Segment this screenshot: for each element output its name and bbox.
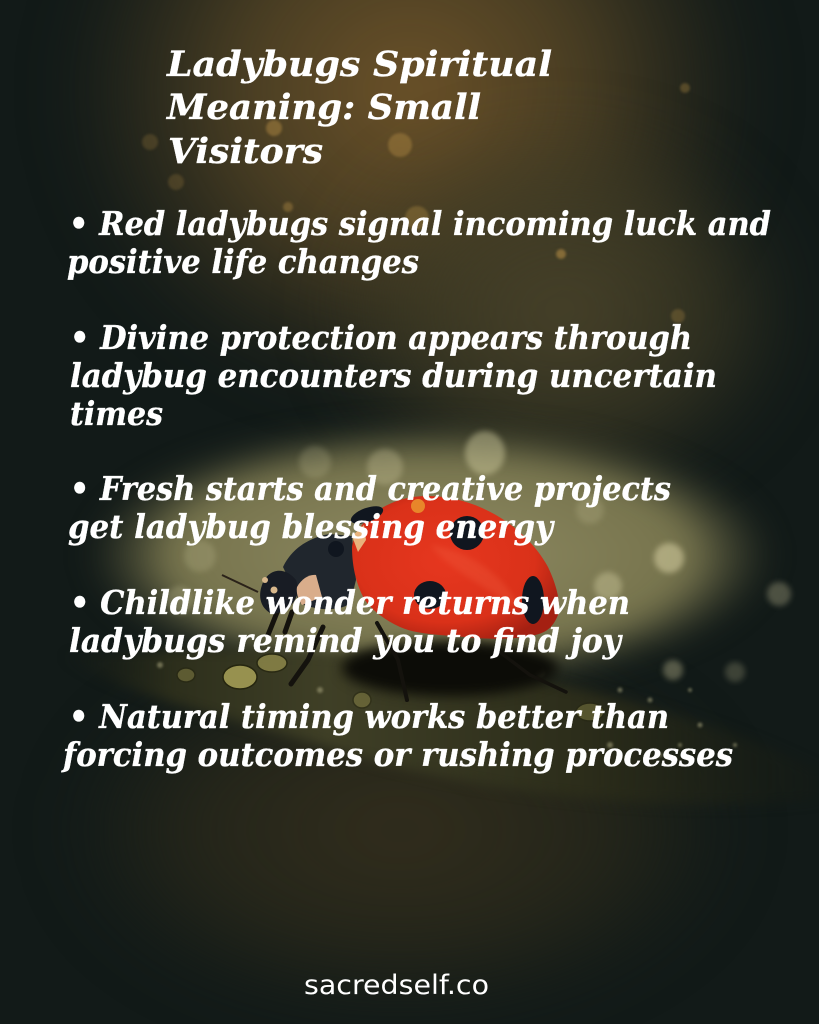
title: Ladybugs Spiritual xyxy=(166,44,552,85)
antenna xyxy=(222,575,258,592)
thorax xyxy=(283,534,356,609)
head xyxy=(260,571,298,614)
spots xyxy=(328,503,544,624)
shadow xyxy=(342,640,558,696)
bullet: natural timing: • Natural timing works better than xyxy=(69,697,669,736)
bokeh lights xyxy=(142,83,690,323)
bullet: divine protection xyxy=(70,318,717,433)
title: Visitors xyxy=(168,131,323,172)
bullet: red ladybugs: • Red ladybugs signal incoming luck and xyxy=(69,204,771,243)
bullet: childlike wonder: ladybugs remind you to find joy xyxy=(69,621,624,660)
cream patch xyxy=(297,575,322,605)
bullet: red ladybugs xyxy=(67,204,771,281)
shell xyxy=(352,496,559,639)
footer website: sacredself.co xyxy=(304,970,489,1001)
bullet: divine protection: ladybug encounters during uncertain xyxy=(70,356,717,395)
bullet: divine protection: times xyxy=(70,394,163,433)
bullet: childlike wonder: • Childlike wonder returns when xyxy=(70,583,630,622)
bullet: natural timing: forcing outcomes or rushing processes xyxy=(61,735,733,774)
bullet: fresh starts: get ladybug blessing energy xyxy=(68,507,556,546)
bullet: divine protection: • Divine protection appears through xyxy=(70,318,692,357)
bullet: natural timing xyxy=(61,697,733,774)
bullet: fresh starts xyxy=(68,469,671,546)
leaf water specks xyxy=(157,647,737,757)
bullet: childlike wonder xyxy=(69,583,630,660)
legs xyxy=(268,610,566,700)
title xyxy=(166,44,552,172)
title: Meaning: Small xyxy=(166,87,481,128)
bullet: fresh starts: • Fresh starts and creative projects xyxy=(70,469,671,508)
droplets xyxy=(177,654,604,721)
ladybug illustration xyxy=(177,496,604,721)
bullet: red ladybugs: positive life changes xyxy=(67,242,419,281)
